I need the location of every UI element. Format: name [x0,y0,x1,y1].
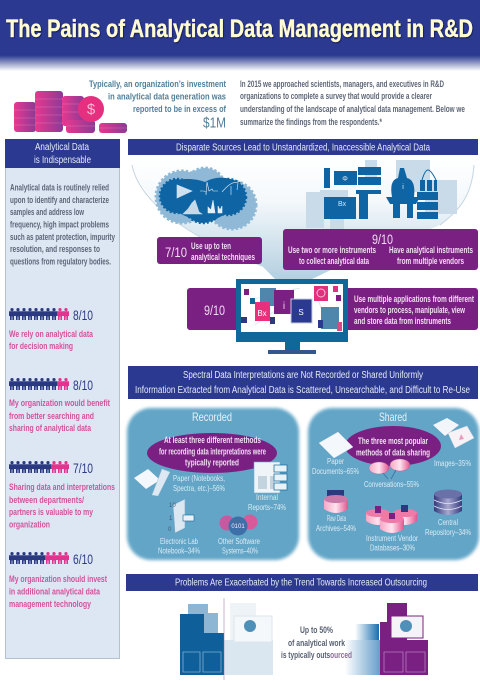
item: raw data archives: Archives–54% [316,524,356,533]
stat: 8/10 better searching: 8/10 [73,377,93,393]
investment callout: Typically, an organization’s investment [89,79,227,90]
item: paper documents: Documents–65% [312,467,359,476]
panel body text [10,182,115,266]
investment callout: $1M [203,114,226,132]
item: conversations [364,459,419,489]
panel heading: is Indispensable [34,155,91,166]
panel body text: questions from regulatory bodies. [10,256,111,266]
stat: 7/10 sharing data: organization [9,520,50,530]
stat: 6/10 invest: management technology [9,599,91,609]
panel body text: frequency, high impact problems [10,220,109,230]
panel: analytical data is indispensable [5,139,120,658]
item: internal reports: Internal [256,493,278,502]
callout: 9/10 applications [187,288,478,330]
stat: 6/10 invest [9,551,107,609]
stat: 8/10 decision making: for decision making [9,341,73,351]
stat: 6/10 invest: My organization should invest [9,574,107,584]
stat: 6/10 invest: in additional analytical data [9,586,101,596]
item: central repository: Central [438,518,458,527]
item: conversations: Conversations–55% [364,480,419,489]
callout ellipse: recorded: typically reported [185,458,239,468]
panel title: shared: Shared [379,410,407,424]
header banner [0,0,480,71]
callout: 9/10 instruments: to collect analytical data [299,256,370,266]
stat: 8/10 decision making: 8/10 [73,307,93,323]
item: other software: 0101 [231,524,245,530]
survey intro text [240,79,465,127]
item: electronic lab notebook: Notebook–34% [158,546,200,556]
section heading: spectral data [128,366,478,399]
stat: 8/10 decision making [9,307,94,351]
stat: 7/10 sharing data: partners is valuable to my [9,507,93,517]
panel: shared [308,408,479,560]
callout: 9/10 applications: 9/10 [204,302,225,318]
investment callout: in analytical data generation was [108,92,226,102]
panel body text: samples and address low [10,207,85,217]
item: other software: Other Software [218,537,260,546]
item: other software [218,514,260,556]
icon: lab instruments: Bx [338,201,347,208]
item: central repository [425,490,471,537]
item: instrument vendor databases [366,505,418,552]
item: paper notebooks [134,469,225,496]
stat: 8/10 better searching: My organization would benefit [9,398,110,408]
stat: 8/10 better searching: from better searching and [9,411,94,421]
icon: monitor with applications: S [298,308,304,317]
item: other software: Systems–40% [222,546,258,556]
stat: 7/10 sharing data: Sharing data and interpretations [9,482,115,492]
funnel background [132,160,474,280]
stat: 7/10 sharing data [9,460,115,530]
icon: lab instruments: i [402,184,404,191]
callout: 7/10 techniques: Use up to ten [191,241,231,251]
icon: lab instruments [306,160,457,229]
icon: lab instruments: Φ [342,176,348,183]
item: images: Images–35% [434,459,471,468]
panel heading: Analytical Data [35,142,89,153]
stat: 8/10 decision making: We rely on analytical data [9,329,94,339]
stat: 6/10 invest: 6/10 [73,551,93,567]
callout ellipse: recorded: for recording data interpretations were [159,446,266,456]
investment callout: reported to be in excess of [133,104,227,115]
callout: 9/10 instruments: 9/10 [372,231,393,247]
icon: gears with spectra [156,168,256,229]
icon: outsourcing lab right [345,603,428,675]
item: paper notebooks: Spectra, etc.)–56% [173,484,225,493]
section heading: spectral data: Spectral Data Interpretations are Not Recorded or Shared Uniformly [183,370,423,381]
item: raw data archives [316,490,356,533]
panel title: recorded: Recorded [192,410,232,424]
icon: monitor with applications: i [283,301,285,312]
item: internal reports [248,462,287,512]
item: electronic lab notebook: 1 [169,516,173,522]
stat: 7/10 sharing data: between departments/ [9,495,84,505]
callout ellipse: shared: The three most popular [358,436,428,446]
section heading: outsourcing [126,574,478,591]
outsourcing statistic: of analytical work [288,638,346,649]
callout ellipse: recorded [147,433,277,473]
item: instrument vendor databases: Instrument Vendor [366,534,418,543]
outsourcing statistic: Up to 50% [300,625,333,636]
panel body text: upon to identify and characterize [10,195,109,205]
panel body text: resolution, and responses to [10,244,100,254]
callout ellipse: shared: methods of data sharing [356,448,430,458]
icon: monitor with applications [236,279,348,354]
callout: 7/10 techniques: analytical techniques [191,252,255,262]
icon: outsourcing lab left [180,598,273,680]
item: paper documents [312,432,359,476]
item: paper notebooks: Paper (Notebooks, [173,474,225,483]
callout: 9/10 instruments [283,229,478,270]
panel heading [5,139,120,168]
item: instrument vendor databases: Databases–30% [370,544,415,552]
callout: 9/10 instruments: Use two or more instruments [288,245,376,255]
stat: 8/10 better searching [9,377,110,433]
item: paper documents: Paper [327,457,344,466]
outsourcing statistic [281,625,352,661]
icon: white spectra [177,182,238,214]
callout: 7/10 techniques: 7/10 [165,244,187,260]
item: images [433,418,474,468]
item: electronic lab notebook: 10 [169,503,176,509]
stat: 7/10 sharing data: 7/10 [73,460,93,476]
icon: coin stacks [14,91,127,133]
panel: recorded [127,408,299,560]
icon: monitor with applications: Bx [257,309,267,318]
item: electronic lab notebook: 0 [168,527,172,533]
item: electronic lab notebook: Electronic Lab [160,537,198,546]
item: internal reports: Reports–74% [248,503,286,512]
panel body text: Analytical data is routinely relied [10,182,109,192]
stat: 8/10 better searching: sharing of analytical data [9,423,92,433]
icon: coin stacks: $ [87,101,96,118]
callout ellipse: shared [345,426,441,466]
panel body text: such as patent protection, impurity [10,232,115,242]
callout: 7/10 techniques [157,237,262,264]
item: raw data archives: Raw Data [327,514,346,523]
survey intro text: summarize the findings from the respondents.* [240,117,382,127]
callout ellipse: recorded: At least three different methods [164,435,261,445]
outsourcing statistic: is typically outsourced [281,650,352,661]
section heading: disparate sources [128,139,478,155]
item: electronic lab notebook [158,499,200,556]
investment callout [89,79,227,132]
